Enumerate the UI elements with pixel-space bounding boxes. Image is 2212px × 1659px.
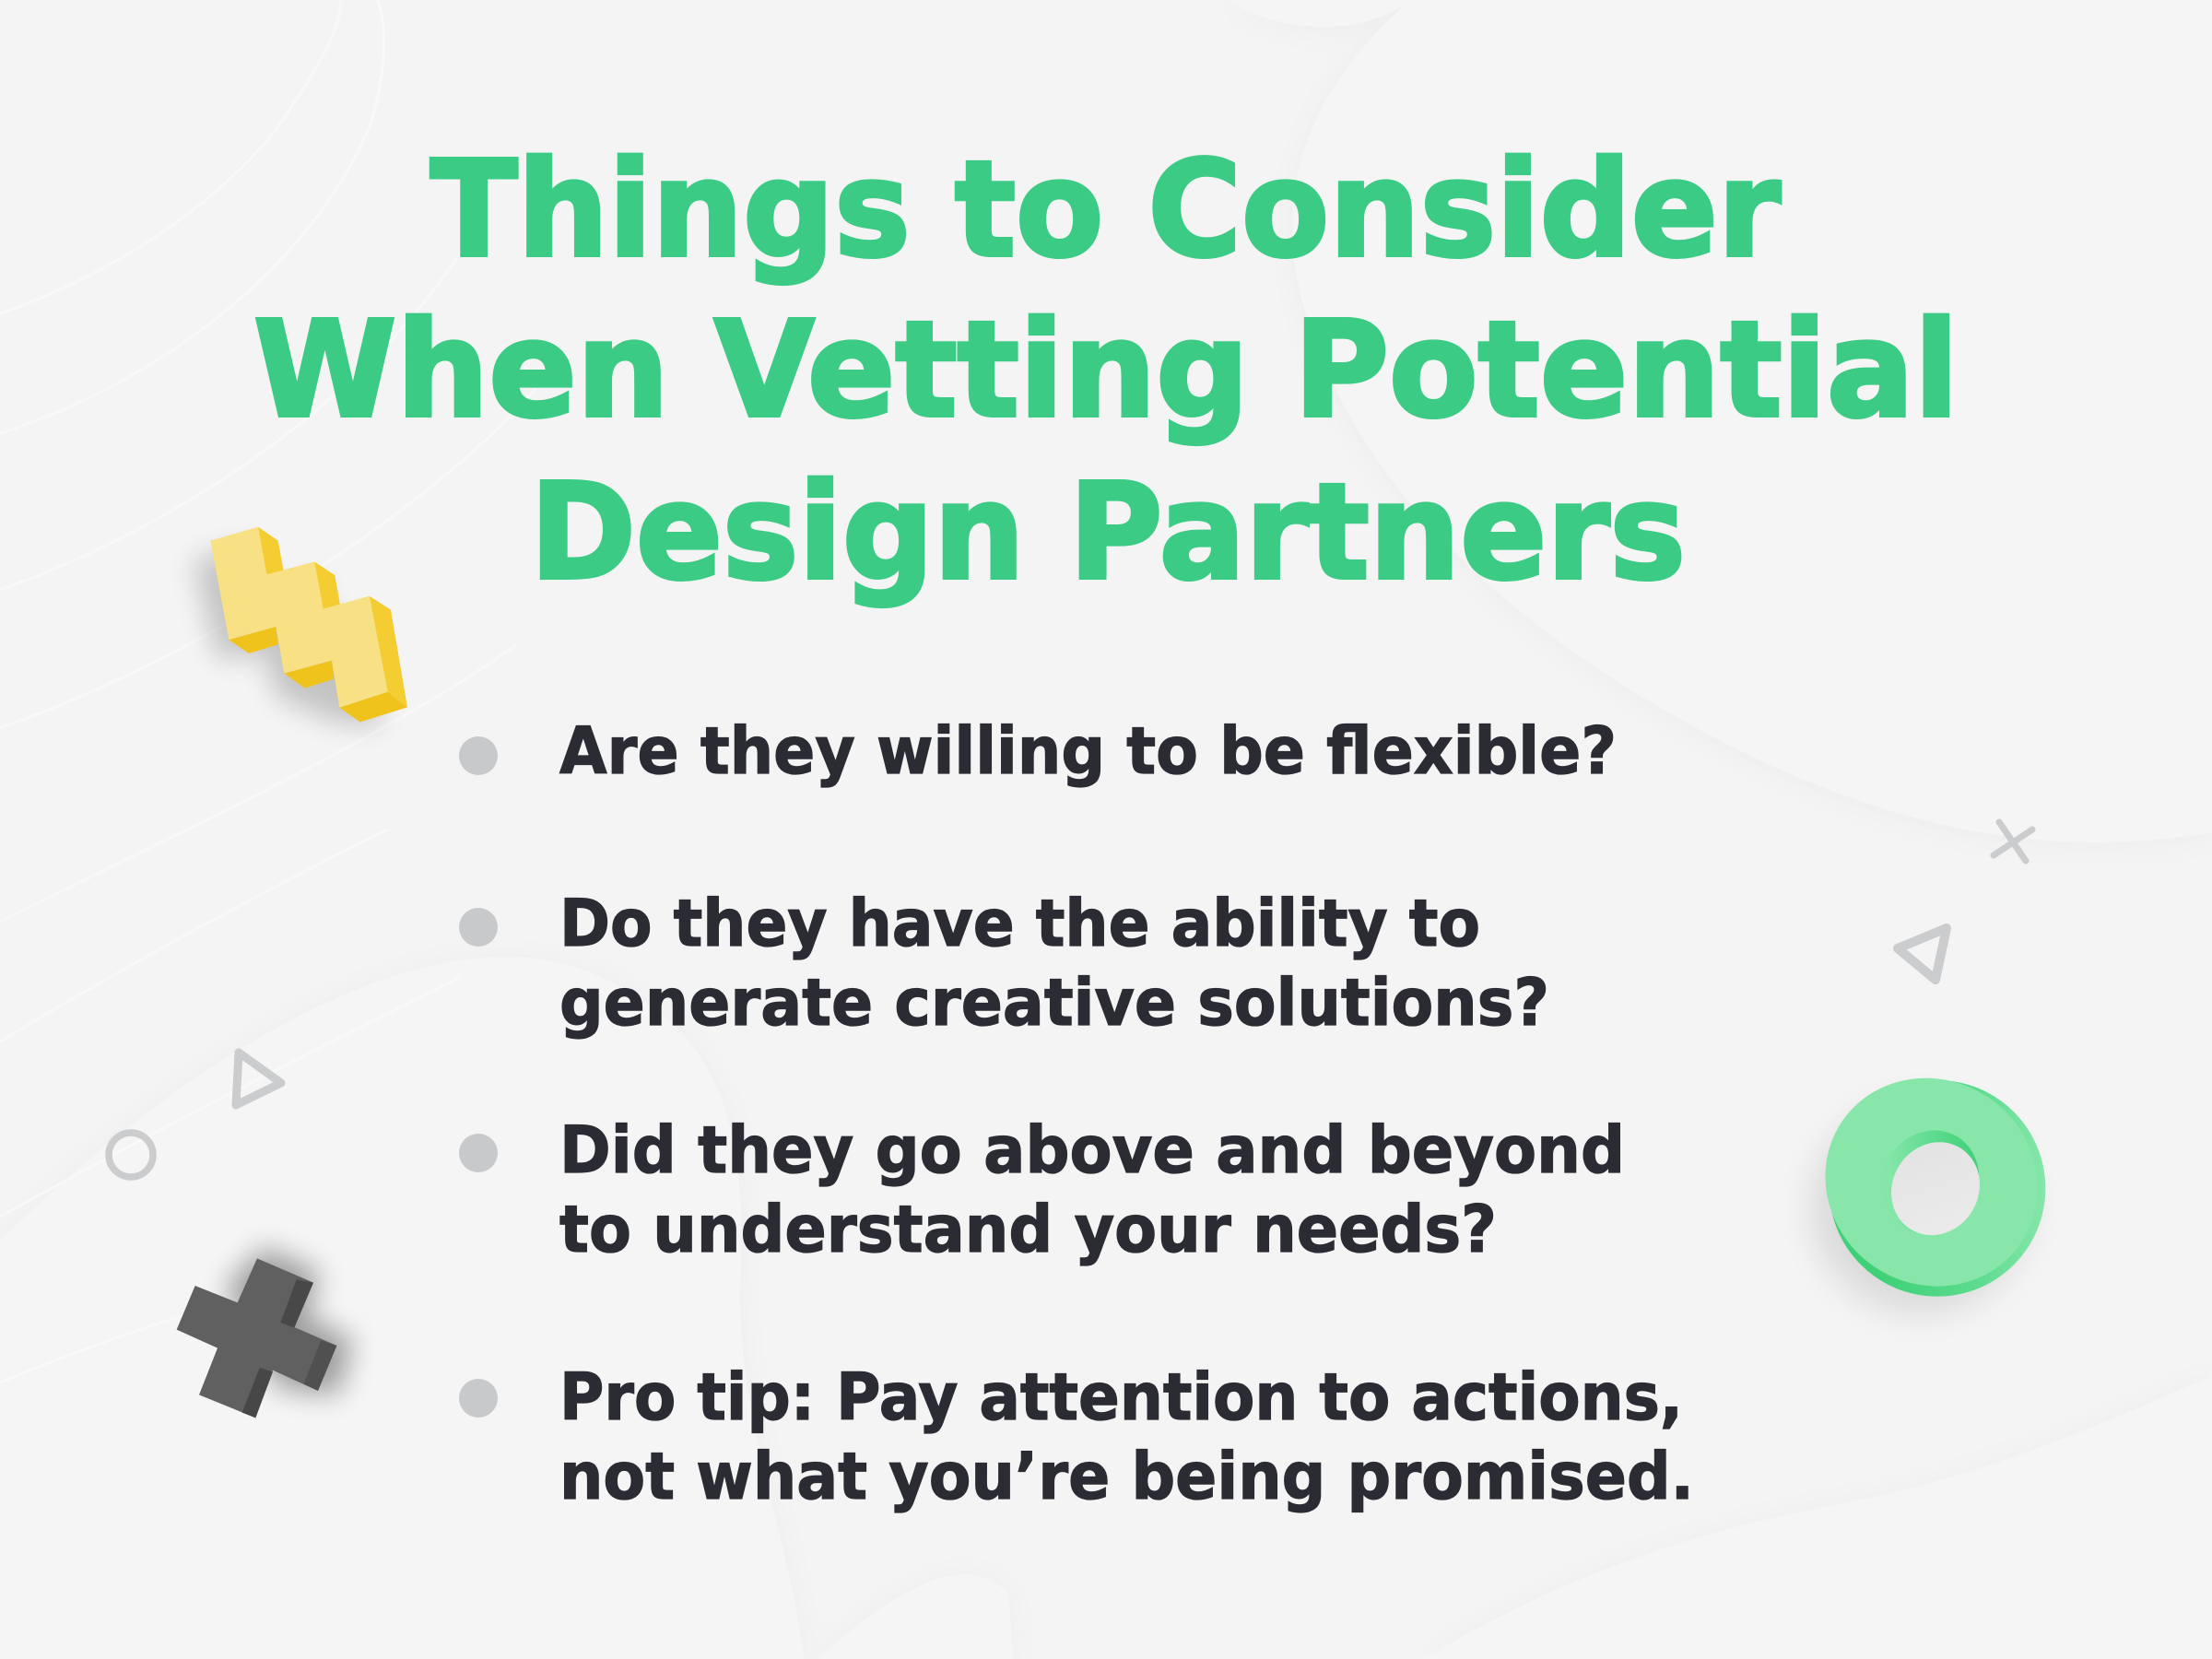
bullet item: creative solutions [459,886,1549,1041]
icon: green 3D ring [1784,1037,2078,1328]
title: Design Partners [530,454,1686,609]
bullet item: flexible: Are they willing to be flexible? [559,713,1617,789]
icon: outline triangle right [1898,928,1947,980]
icon: x mark [1994,822,2032,861]
title [253,132,1959,609]
bullet item: above and beyond: to understand your needs? [559,1192,1497,1267]
bullet item: pro tip: Pro tip: Pay attention to actions, [559,1359,1683,1435]
bullet item: pro tip [459,1359,1694,1514]
bullet item: creative solutions: Do they have the ability to [559,886,1480,961]
icon: dark gray 3D cross [177,1247,353,1418]
bullet item: pro tip: not what you’re being promised. [559,1439,1694,1514]
icon: outline circle [109,1133,153,1177]
bullet item: above and beyond [459,1112,1625,1267]
bullet list [459,713,1694,1514]
title: Things to Consider [430,132,1781,287]
icon: outline triangle left [236,1053,281,1105]
bullet item: above and beyond: Did they go above and beyond [559,1112,1625,1188]
icon: yellow 3D zigzag block [194,527,407,726]
bullet item: creative solutions: generate creative solutions? [559,965,1549,1041]
title: When Vetting Potential [253,292,1959,447]
